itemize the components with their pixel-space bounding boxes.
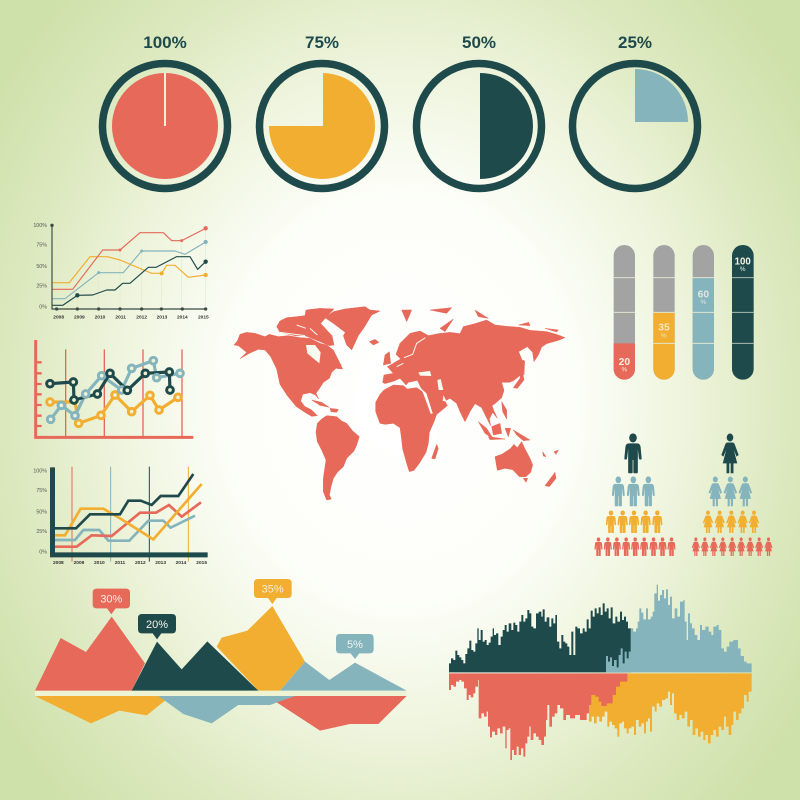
line chart: thin lines with years [33, 223, 209, 321]
line chart: thick lines with years: 25% [36, 529, 47, 535]
callout: 35% [254, 579, 292, 604]
map: greenland [325, 307, 380, 350]
tube: 100%: % [740, 266, 746, 273]
icon: large woman [721, 434, 739, 473]
tube: 60%: 60 [698, 289, 709, 300]
line chart: thin lines with years: 2008 [53, 315, 64, 321]
map: north america [234, 332, 343, 416]
heading: 25%: 25% [618, 33, 652, 52]
mountain area chart [35, 579, 407, 731]
map: tasmania and new zealand [523, 472, 556, 487]
tube: 35%: 35 [658, 323, 670, 334]
world map [234, 307, 565, 500]
line chart: thick lines with years: 2014 [176, 560, 187, 566]
map: australia [495, 442, 533, 477]
map: madagascar [432, 444, 438, 459]
line chart: thick lines with years: 2013 [155, 560, 166, 566]
line chart: thin lines with years: 2012 [136, 315, 147, 321]
line chart: thick lines with years: 75% [36, 488, 47, 494]
callout: 35%: 35% [262, 584, 284, 596]
tube: 35% [653, 245, 675, 380]
map: eurasia [383, 320, 565, 426]
heading: 100%: 100% [143, 33, 187, 52]
line chart: thin lines with years: 2013 [157, 315, 168, 321]
pie gauge: 50% [416, 64, 542, 188]
map: africa [376, 385, 437, 472]
line chart: thick lines with years: 50% [36, 509, 47, 515]
line chart: thin lines with years: 50% [36, 264, 47, 270]
heading: 75%: 75% [305, 33, 339, 52]
row: orange men [606, 510, 662, 533]
callout: 5% [336, 634, 374, 659]
waveform: red lower [449, 673, 628, 760]
tube: 60% [693, 245, 714, 380]
people pyramid: women [692, 434, 773, 556]
icon: large man [624, 433, 642, 473]
tube: 100% [732, 245, 754, 380]
line chart: thick lines with years: 2010 [94, 560, 105, 566]
row: red men [594, 537, 676, 556]
tube: 20% [614, 245, 635, 380]
map: south america [316, 416, 359, 500]
row: orange women [703, 510, 759, 533]
map: white coastal veins [280, 325, 425, 367]
map: arctic islands [277, 308, 334, 346]
map: inland seas [306, 345, 447, 402]
line chart: thin lines with years: 2009 [74, 315, 85, 321]
line chart: thin lines with years: 25% [36, 284, 47, 290]
tube: 20%: 20 [619, 357, 630, 368]
row: red women [692, 537, 773, 556]
line chart: thick lines with years [33, 467, 208, 566]
tube: 100%: 100 [735, 256, 751, 267]
tube: 35%: % [661, 332, 667, 339]
callout: 20%: 20% [146, 619, 168, 631]
line chart: ringed markers [36, 340, 193, 437]
map: asian and pacific islands [383, 308, 558, 457]
waveform: dark upper [449, 603, 631, 672]
row: blue women [709, 476, 752, 506]
waveform chart [449, 585, 752, 760]
line chart: thin lines with years: 0% [39, 305, 47, 311]
line chart: thick lines with years: 2012 [135, 560, 146, 566]
line chart: thin lines with years: 75% [36, 242, 47, 248]
waveform: orange lower [589, 673, 752, 743]
callout: 20% [138, 614, 176, 639]
pie gauge: 25% [572, 64, 698, 188]
callout: 30% [93, 589, 130, 614]
line chart: thick lines with years: 0% [39, 550, 47, 556]
map: north atlantic islands [312, 339, 379, 412]
line chart: thick lines with years: 100% [33, 468, 47, 474]
pie gauge: 100% [102, 64, 228, 188]
heading: 50%: 50% [462, 33, 496, 52]
tube: 60%: % [701, 299, 707, 306]
line chart: thick lines with years: 2008 [53, 560, 64, 566]
callout: 5%: 5% [347, 639, 363, 651]
line chart: thick lines with years: 2009 [74, 560, 85, 566]
callout: 30%: 30% [100, 594, 123, 606]
line chart: thin lines with years: 2015 [198, 315, 209, 321]
progress tubes [614, 245, 754, 380]
tube: 20%: % [622, 367, 628, 374]
people pyramid: men [594, 433, 676, 556]
line chart: thin lines with years: 2011 [115, 315, 126, 321]
line chart: thin lines with years: 2010 [95, 315, 106, 321]
line chart: thick lines with years: 2011 [115, 560, 126, 566]
pie gauge: 75% [260, 64, 384, 188]
line chart: thin lines with years: 100% [33, 223, 47, 229]
waveform: blue upper [606, 585, 752, 672]
line chart: thick lines with years: 2015 [196, 560, 207, 566]
line chart: thin lines with years: 2014 [177, 315, 188, 321]
row: blue men [612, 476, 655, 506]
